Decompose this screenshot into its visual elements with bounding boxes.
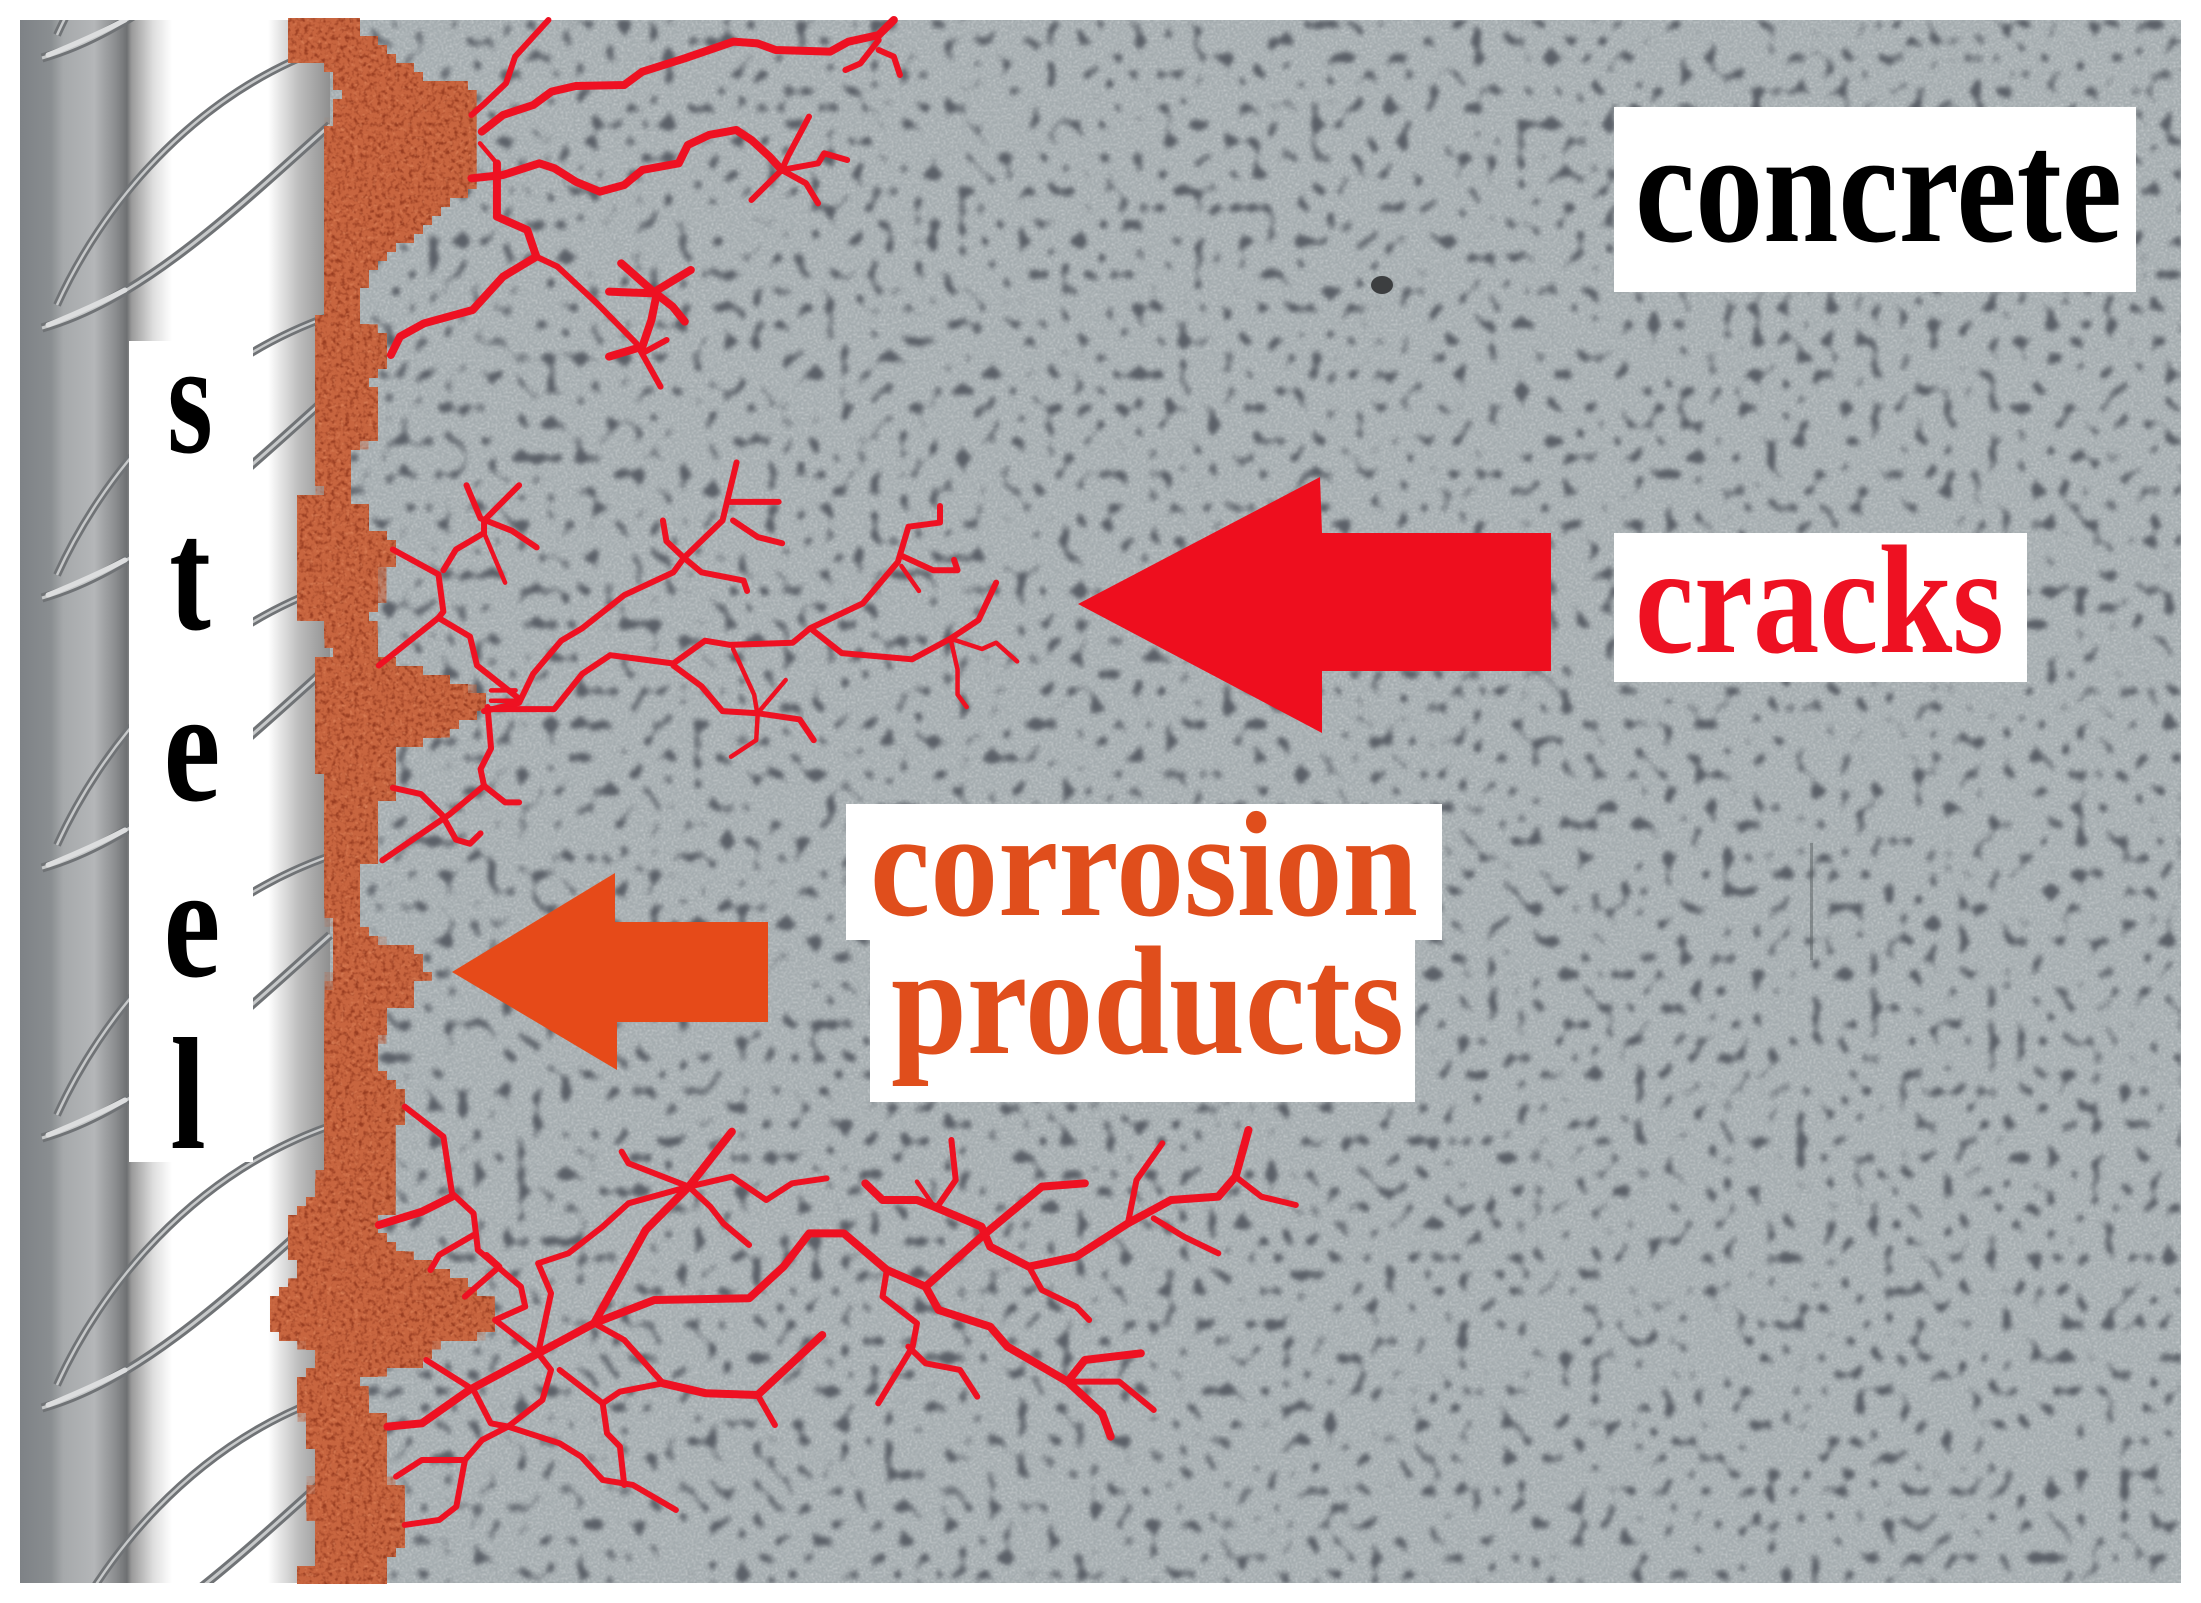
steel label: e [164,659,220,835]
steel label [129,310,253,1183]
label: cracks: cracks [1635,514,2004,686]
steel rebar [20,0,330,1603]
cracks: bottom group [379,1107,1296,1525]
steel label: l [170,1007,206,1183]
cracks: middle group [379,462,1017,860]
label: corrosion products: products [891,915,1404,1087]
label: concrete: concrete [1635,98,2122,276]
steel label: t [169,487,211,665]
label: corrosion products [846,782,1442,1102]
steel label: e [164,835,220,1011]
cracks: top group [391,20,900,387]
arrow: corrosion products [452,873,768,1070]
corrosion products layer [267,20,499,1583]
label: corrosion products: corrosion [870,782,1418,948]
arrow: cracks [1078,477,1551,733]
steel label: s [167,310,213,487]
